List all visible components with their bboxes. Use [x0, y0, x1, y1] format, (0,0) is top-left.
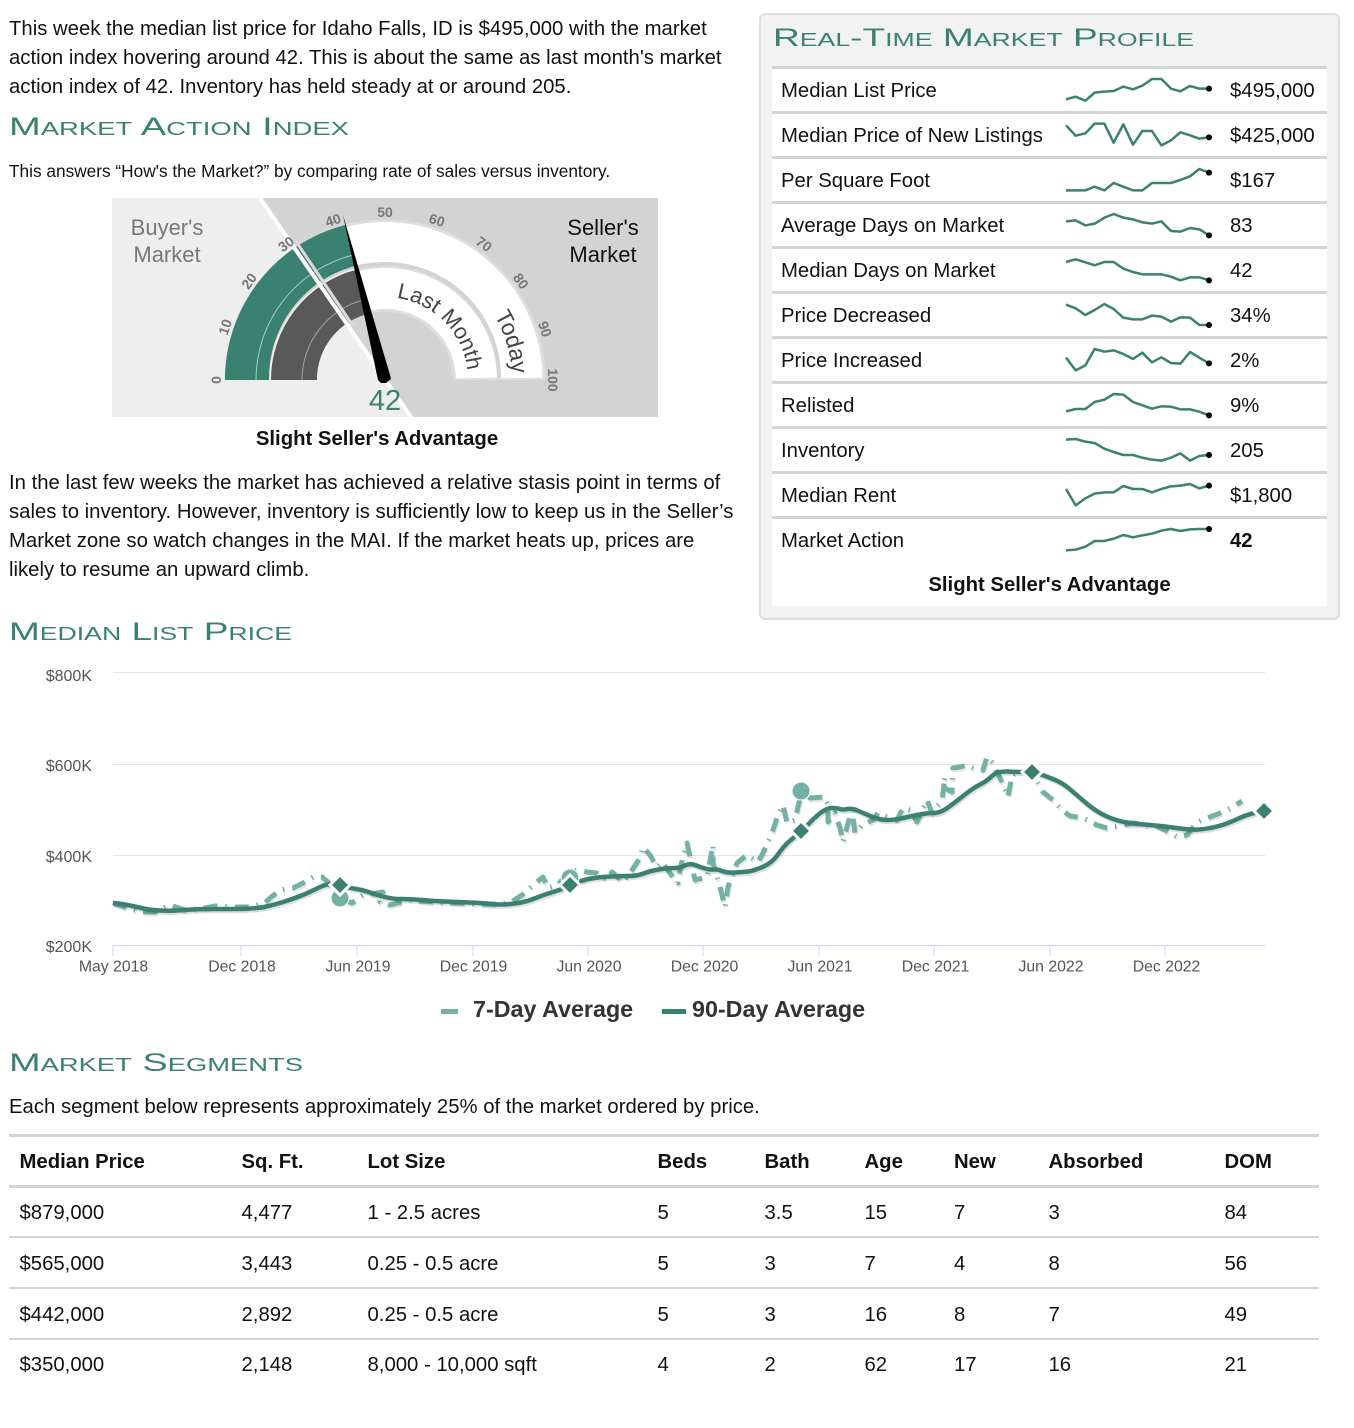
table row 4: 2,148 — [242, 1354, 292, 1376]
curved label: last month: Last Month — [398, 283, 482, 370]
table row 2: 5 — [658, 1253, 669, 1275]
table header: Bath — [764, 1151, 810, 1173]
analysis paragraph: In the last few weeks the market has achieved a relative stasis point in terms of — [9, 472, 720, 494]
row: price increased: Price Increased — [781, 350, 922, 372]
analysis paragraph: likely to resume an upward climb. — [9, 559, 309, 581]
table row 1: 7 — [954, 1202, 965, 1224]
y axis labels — [46, 668, 92, 956]
table row 3: 8 — [954, 1304, 965, 1326]
gauge scale labels: 0 — [208, 376, 224, 384]
legend: 90-day average: 90-Day Average — [692, 996, 865, 1022]
gauge centre area — [317, 312, 453, 380]
intro paragraph: This week the median list price for Idaho Falls, ID is $495,000 with the market — [9, 18, 707, 40]
intro paragraph: action index of 42. Inventory has held steady at or around 205. — [9, 76, 571, 98]
gauge scale labels: 100 — [545, 368, 561, 392]
table row 1: 3.5 — [764, 1202, 793, 1224]
table header: Beds — [658, 1151, 707, 1173]
table row 2: 4 — [954, 1253, 965, 1275]
table row 2 — [20, 1253, 1247, 1275]
gauge band: last month — [270, 264, 499, 380]
row: price decreased: Price Decreased — [781, 305, 931, 327]
7-day markers — [331, 782, 810, 907]
table row 4: 21 — [1224, 1354, 1247, 1376]
profile table background — [772, 66, 1327, 606]
table row 3: 0.25 - 0.5 acre — [368, 1304, 498, 1326]
90-day average shadow — [114, 773, 1265, 913]
table row 1: 5 — [658, 1202, 669, 1224]
gauge scale labels: 90 — [535, 319, 555, 339]
table header: Absorbed — [1048, 1151, 1143, 1173]
table: market segments — [9, 1134, 1319, 1376]
gauge scale labels: 60 — [427, 210, 447, 230]
table row 3: 5 — [658, 1304, 669, 1326]
row: average days on market — [781, 215, 1253, 237]
gauge: market action index — [112, 198, 658, 417]
row: median rent: $1,800 — [1230, 485, 1292, 507]
chart gridlines — [113, 672, 1265, 856]
gauge explanation text: This answers “How's the Market?” by comparing rate of sales versus inventory. — [9, 161, 610, 181]
analysis paragraph — [9, 472, 733, 581]
panel heading: Real-Time Market Profile — [773, 24, 1194, 52]
row: price increased — [781, 350, 1259, 372]
table row 4: 16 — [1048, 1354, 1071, 1376]
table row 1: 1 - 2.5 acres — [368, 1202, 480, 1224]
table header: Sq. Ft. — [242, 1151, 304, 1173]
table row 1: 4,477 — [242, 1202, 292, 1224]
90-day average series — [113, 771, 1264, 911]
row: median list price: Median List Price — [781, 80, 937, 102]
gauge scale labels: 10 — [215, 317, 235, 337]
gauge band: today — [247, 243, 522, 380]
sparklines: rows 6 to 11 — [1065, 302, 1212, 552]
table row 2: 3,443 — [242, 1253, 292, 1275]
x axis labels — [79, 958, 1200, 976]
gauge scale labels: 30 — [275, 233, 297, 255]
panel: real-time market profile — [759, 13, 1340, 620]
row: relisted — [781, 395, 1259, 417]
divider line — [259, 196, 412, 419]
row: per square foot — [781, 170, 1275, 192]
table row 1: 84 — [1224, 1202, 1247, 1224]
row: median rent — [781, 485, 1292, 507]
table row 1: $879,000 — [20, 1202, 104, 1224]
table row 3: 7 — [1048, 1304, 1060, 1326]
row: median days on market: Median Days on Market — [781, 260, 996, 282]
table row 3: 2,892 — [242, 1304, 292, 1326]
heading: median list price: Median List Price — [9, 618, 292, 646]
row: median days on market — [781, 260, 1253, 282]
table header: DOM — [1224, 1151, 1272, 1173]
row: median price of new listings: $425,000 — [1230, 125, 1315, 147]
gauge scale labels: 50 — [377, 204, 393, 220]
gauge outline — [271, 266, 499, 380]
segments intro: Each segment below represents approximately 25% of the market ordered by price. — [9, 1096, 760, 1118]
divider strip — [294, 241, 355, 326]
table header: Lot Size — [368, 1151, 445, 1173]
row: median list price: $495,000 — [1230, 80, 1315, 102]
table row 2: $565,000 — [20, 1253, 104, 1275]
table row 1: 3 — [1048, 1202, 1060, 1224]
x axis labels: Dec 2020 — [671, 958, 739, 976]
row: average days on market: Average Days on Market — [781, 215, 1004, 237]
curved label: today: Today — [497, 308, 524, 372]
row: median days on market: 42 — [1230, 260, 1253, 282]
row: average days on market: 83 — [1230, 215, 1253, 237]
row: relisted: Relisted — [781, 395, 854, 417]
gauge scale labels: 20 — [238, 270, 260, 292]
x axis labels: Dec 2022 — [1133, 958, 1200, 976]
table row 1 — [20, 1202, 1247, 1224]
heading: market action index: Market Action Index — [9, 113, 349, 141]
7-day average series — [113, 757, 1243, 914]
row: median price of new listings — [781, 125, 1315, 147]
legend: 7-day average: 7-Day Average — [473, 996, 633, 1022]
intro paragraph — [9, 18, 722, 98]
row: median price of new listings: Median Price of New Listings — [781, 125, 1043, 147]
gauge scale labels: 40 — [323, 210, 343, 230]
row: relisted: 9% — [1230, 395, 1259, 417]
table row 4: 17 — [954, 1354, 977, 1376]
label: buyer's market: Market — [133, 242, 201, 267]
label: seller's market: Market — [569, 242, 637, 267]
line chart: median list price — [46, 668, 1272, 1022]
table row 3: 16 — [864, 1304, 887, 1326]
row: per square foot: $167 — [1230, 170, 1275, 192]
row: market action: 42 — [1230, 530, 1253, 552]
table row 1: 15 — [864, 1202, 887, 1224]
table header: Median Price — [20, 1151, 145, 1173]
x axis labels: Dec 2021 — [902, 958, 970, 976]
row: market action — [781, 530, 1253, 552]
row: price increased: 2% — [1230, 350, 1259, 372]
table row 3: $442,000 — [20, 1304, 104, 1326]
90-day markers — [330, 762, 1274, 895]
x axis labels: Jun 2019 — [325, 958, 391, 976]
row: median list price — [781, 80, 1315, 102]
gauge caption: Slight Seller's Advantage — [256, 428, 498, 450]
table row 2: 0.25 - 0.5 acre — [368, 1253, 498, 1275]
y axis labels: $600K — [46, 758, 92, 775]
analysis paragraph: sales to inventory. However, inventory is sufficiently low to keep us in the Seller’s — [9, 501, 733, 523]
row: market action: Market Action — [781, 530, 904, 552]
table row 4 — [20, 1354, 1247, 1376]
table row 4: 4 — [658, 1354, 669, 1376]
gauge scale labels: 70 — [473, 233, 495, 255]
table row 2: 56 — [1224, 1253, 1247, 1275]
x axis labels: Jun 2020 — [556, 958, 622, 976]
row: inventory — [781, 440, 1264, 462]
table row 4: 8,000 - 10,000 sqft — [368, 1354, 537, 1376]
y axis labels: $400K — [46, 849, 92, 866]
table row 3: 49 — [1224, 1304, 1247, 1326]
intro paragraph: action index hovering around 42. This is about the same as last month's market — [9, 47, 722, 69]
analysis paragraph: Market zone so watch changes in the MAI. If the market heats up, prices are — [9, 530, 694, 552]
table header — [20, 1151, 1272, 1173]
sparklines: rows 1 to 5 — [1065, 78, 1212, 284]
row: per square foot: Per Square Foot — [781, 170, 930, 192]
row: price decreased — [781, 305, 1271, 327]
table row 4: 62 — [864, 1354, 887, 1376]
table row 2: 8 — [1048, 1253, 1060, 1275]
table header: New — [954, 1151, 996, 1173]
heading: market segments: Market Segments — [9, 1049, 303, 1077]
row: inventory: Inventory — [781, 440, 865, 462]
gauge scale labels: 80 — [510, 270, 532, 292]
chart x axis — [113, 945, 1265, 956]
table header: Age — [864, 1151, 903, 1173]
label: seller's market: Seller's — [567, 215, 639, 240]
table row 2: 7 — [864, 1253, 876, 1275]
gauge value: 42 — [369, 385, 401, 417]
table row 3 — [20, 1304, 1247, 1326]
profile table rows — [772, 66, 1327, 596]
label: buyer's market: Buyer's — [131, 215, 203, 240]
y axis labels: $800K — [46, 668, 92, 685]
table row 3: 3 — [764, 1304, 776, 1326]
profile caption: Slight Seller's Advantage — [928, 574, 1171, 596]
row: inventory: 205 — [1230, 440, 1264, 462]
row: median rent: Median Rent — [781, 485, 896, 507]
table row 2: 3 — [764, 1253, 776, 1275]
row: price decreased: 34% — [1230, 305, 1271, 327]
gauge needle — [343, 215, 391, 383]
x axis labels: Jun 2021 — [787, 958, 853, 976]
table row 4: 2 — [764, 1354, 776, 1376]
x axis labels: Dec 2018 — [208, 958, 276, 976]
y axis labels: $200K — [46, 939, 92, 956]
x axis labels: Dec 2019 — [440, 958, 508, 976]
x axis labels: May 2018 — [79, 958, 148, 976]
table row 4: $350,000 — [20, 1354, 104, 1376]
x axis labels: Jun 2022 — [1018, 958, 1084, 976]
gauge scale labels — [208, 204, 561, 392]
